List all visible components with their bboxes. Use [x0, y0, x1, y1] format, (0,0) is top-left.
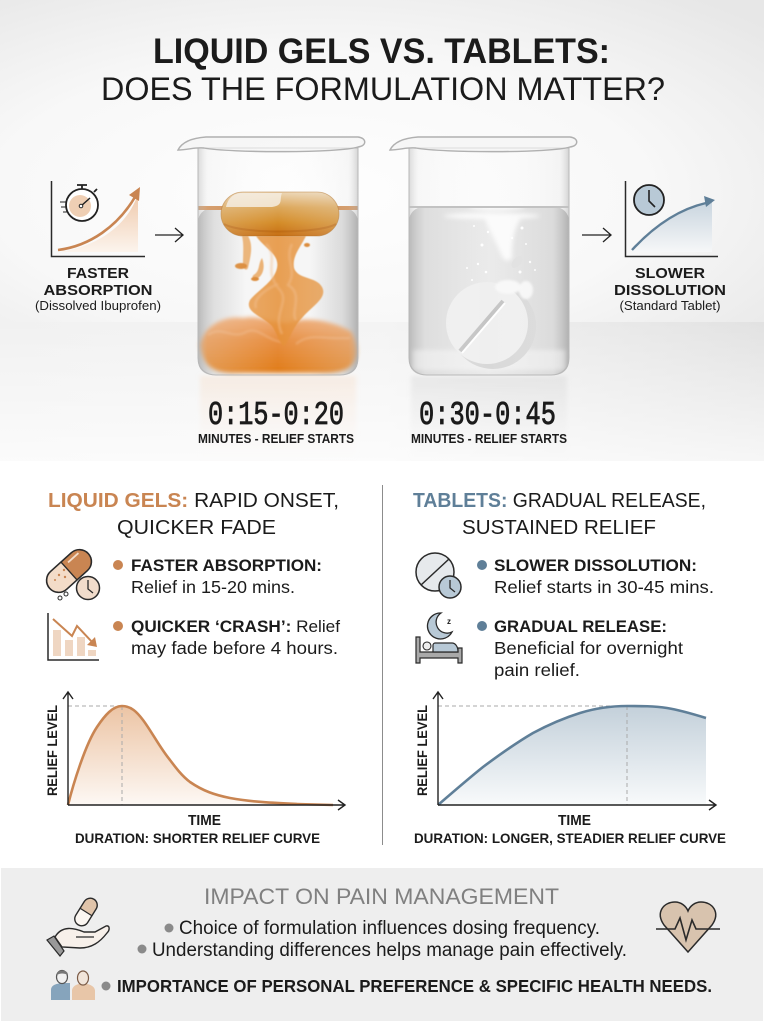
title [101, 32, 665, 107]
orange pool [200, 317, 357, 373]
heading: tablets: SUSTAINED RELIEF [462, 516, 656, 539]
icon: tablet with clock [416, 553, 461, 598]
bullet: gradual release: Beneficial for overnight [494, 638, 683, 658]
bullet: faster absorption [113, 556, 322, 597]
powder cloud [444, 202, 540, 260]
dissolving plume [235, 236, 323, 346]
icon: moon and bed [416, 613, 462, 663]
bullet: gradual release: GRADUAL RELEASE: [494, 617, 667, 636]
icon: hand with capsule [47, 896, 109, 956]
chart: tablets relief curve: RELIEF LEVEL [414, 705, 430, 796]
timer: liquid gels [198, 397, 354, 446]
panel: impact on pain management [1, 868, 763, 1021]
bullet: gradual release [477, 617, 683, 680]
bullet: quicker crash [113, 617, 340, 658]
capsule [221, 192, 339, 236]
panel: tablets [413, 489, 726, 846]
bullet: quicker crash: QUICKER ‘CRASH’: Relief [131, 617, 340, 636]
timer: tablets: MINUTES - RELIEF STARTS [411, 431, 567, 446]
bullet: personal preference: IMPORTANCE OF PERSONAL PREFERENCE & SPECIFIC HEALTH NEEDS. [117, 976, 712, 996]
heading: impact: IMPACT ON PAIN MANAGEMENT [204, 884, 559, 909]
icon: slower dissolution chart [626, 181, 718, 256]
label: faster absorption: (Dissolved Ibuprofen) [35, 299, 161, 313]
title: DOES THE FORMULATION MATTER? [101, 71, 665, 107]
label: faster absorption: ABSORPTION [44, 282, 152, 299]
bullet: faster absorption: FASTER ABSORPTION: [131, 556, 322, 575]
glass [198, 148, 358, 375]
icon: faster absorption chart [52, 181, 145, 256]
label: faster absorption: FASTER [67, 265, 129, 282]
chart: liquid gels relief curve [44, 692, 345, 846]
bullet: slower dissolution: Relief starts in 30-45 mins. [494, 577, 714, 597]
chart: tablets relief curve: DURATION: LONGER, STEADIER RELIEF CURVE [414, 830, 726, 846]
icon: capsule with clock [42, 545, 100, 600]
timer: liquid gels: MINUTES - RELIEF STARTS [198, 431, 354, 446]
arrow: left chart to beaker [155, 228, 183, 242]
heading: tablets: TABLETS: GRADUAL RELEASE, [413, 489, 706, 512]
timer: tablets: 0:30-0:45 [419, 397, 556, 434]
glass [409, 148, 569, 375]
chart: tablets relief curve [414, 692, 726, 846]
label: slower dissolution: (Standard Tablet) [620, 299, 720, 313]
heading: tablets [413, 489, 706, 539]
label: slower dissolution: SLOWER [635, 265, 705, 282]
icon: heart with pulse [656, 902, 720, 952]
timer: liquid gels: 0:15-0:20 [208, 397, 344, 434]
bullet: dosing frequency: Choice of formulation influences dosing frequency. [179, 918, 600, 939]
divider [382, 485, 384, 845]
chart: tablets relief curve: TIME [558, 812, 591, 829]
icon: falling bars [48, 613, 99, 660]
label: faster absorption [35, 265, 161, 313]
title: LIQUID GELS VS. TABLETS: [153, 32, 610, 71]
panel: hero background [0, 0, 764, 461]
icon: moon and bed: z [447, 617, 451, 626]
bullet: slower dissolution [477, 556, 714, 597]
panel: liquid gels [42, 489, 345, 846]
timer: tablets [411, 397, 567, 446]
bullet: slower dissolution: SLOWER DISSOLUTION: [494, 556, 697, 575]
chart: liquid gels relief curve: RELIEF LEVEL [44, 705, 60, 796]
heading: liquid gels: LIQUID GELS: RAPID ONSET, [48, 489, 339, 512]
bullet: gradual release: pain relief. [494, 660, 580, 680]
water line [198, 206, 358, 210]
bullet: manage pain: Understanding differences helps manage pain effectively. [152, 940, 627, 961]
heading: liquid gels: QUICKER FADE [117, 516, 276, 539]
bullet: faster absorption: Relief in 15-20 mins. [131, 577, 295, 597]
beaker: tablet [390, 137, 700, 375]
chart: liquid gels relief curve: DURATION: SHORTER RELIEF CURVE [75, 830, 320, 846]
label: slower dissolution: DISSOLUTION [614, 282, 726, 299]
chart: liquid gels relief curve: TIME [188, 812, 221, 829]
label: slower dissolution [614, 265, 726, 313]
beaker: liquid gel [178, 137, 365, 375]
icon: two people [51, 970, 95, 1000]
bullet: quicker crash: may fade before 4 hours. [131, 638, 338, 658]
heading: liquid gels [48, 489, 339, 539]
tablet [450, 283, 536, 369]
arrow: right beaker to chart [582, 228, 611, 242]
